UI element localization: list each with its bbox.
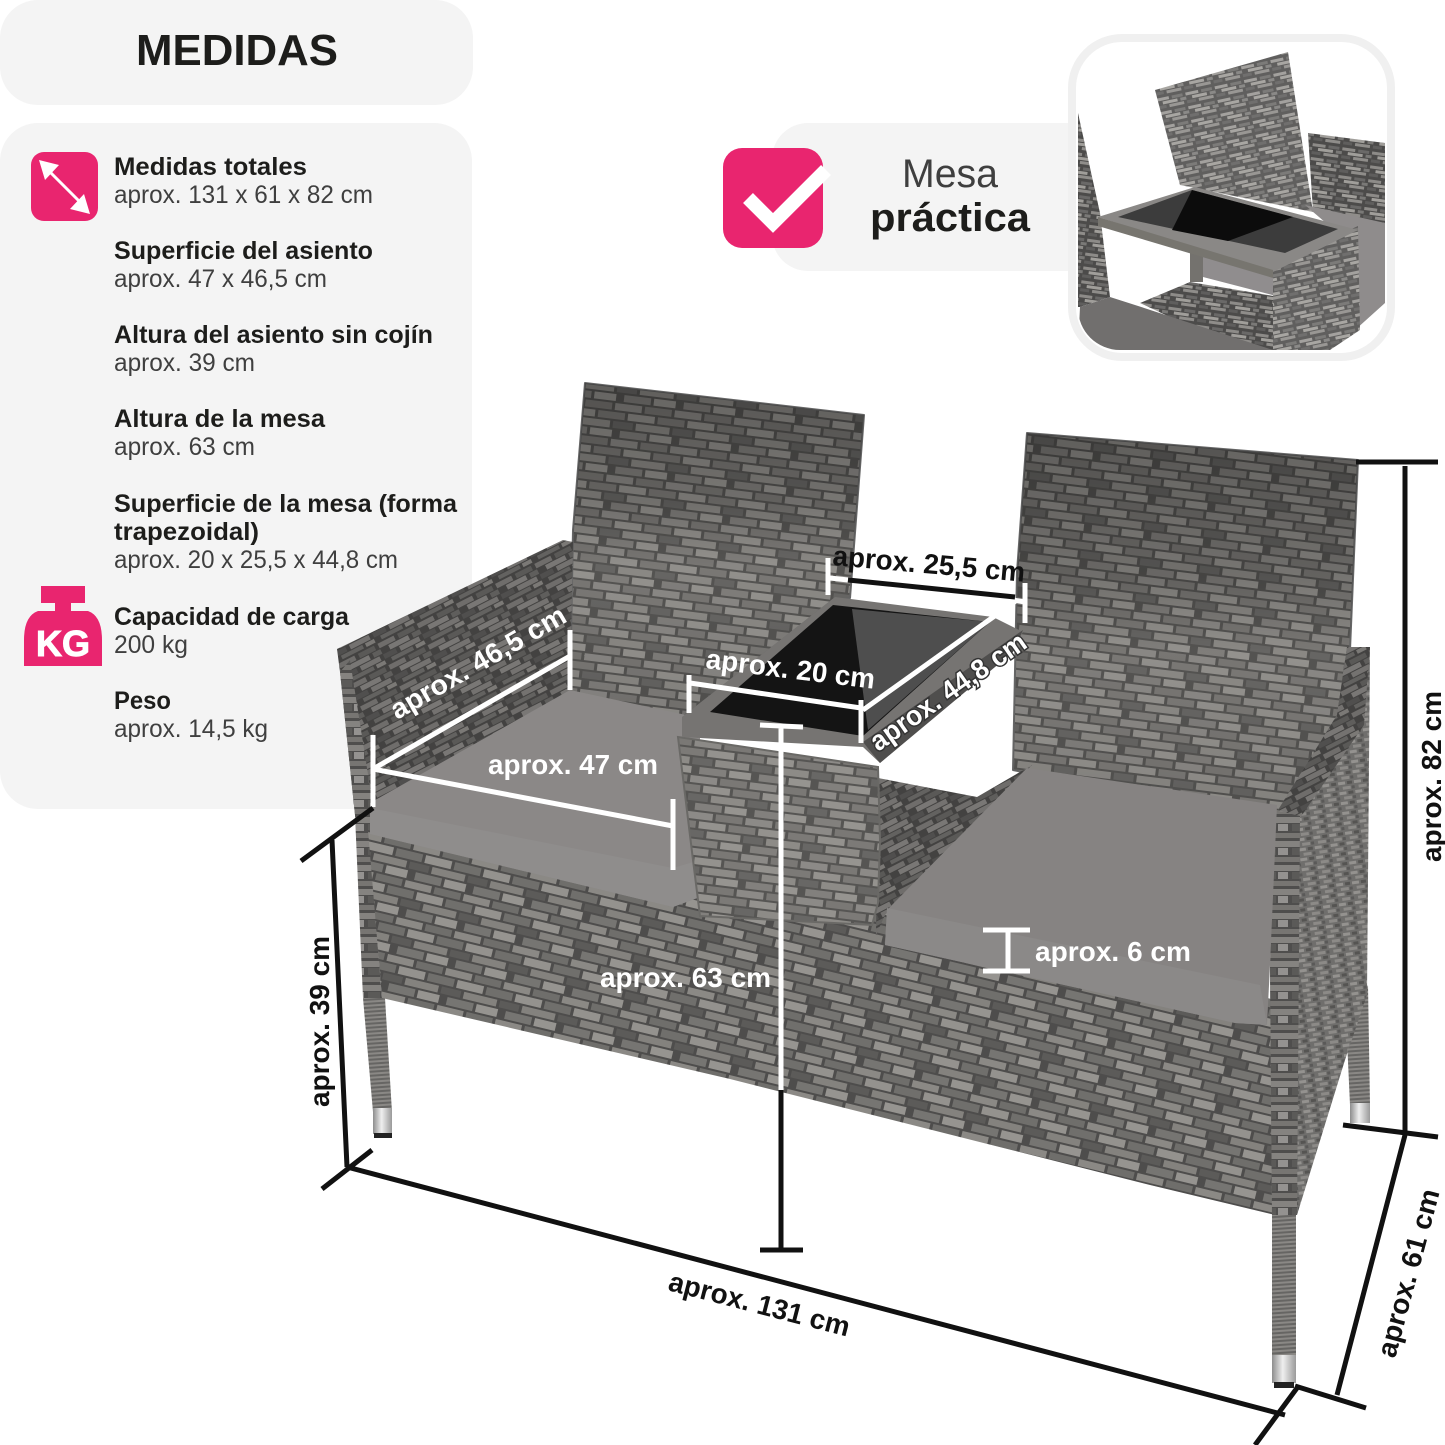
right cushion (885, 768, 1277, 1025)
dimension labels: aprox. 46,5 cm (384, 599, 571, 725)
text block: altura del asiento (114, 321, 433, 377)
right backrest (1013, 433, 1358, 830)
dimension labels: aprox. 20 cm (704, 643, 877, 695)
icon: diagonal arrows (31, 152, 98, 221)
text block: altura de la mesa: aprox. 63 cm (114, 433, 255, 461)
callout: mesa práctica (723, 123, 1102, 271)
table column (678, 737, 880, 925)
text block: superficie del asiento (114, 237, 373, 293)
text block: altura del asiento: Altura del asiento sin cojín (114, 321, 433, 349)
back right leg (1347, 985, 1370, 1123)
dimension labels: aprox. 63 cm (600, 962, 771, 993)
right armrest (1270, 647, 1370, 1215)
left armrest (337, 540, 573, 998)
dimension lines: black (301, 462, 1438, 1445)
front left leg (363, 998, 392, 1138)
text block: capacidad de carga: Capacidad de carga (114, 603, 350, 631)
icon: kg weight: KG (36, 623, 90, 664)
shelf under table (876, 765, 1032, 935)
title panel: Medidas: MEDIDAS (136, 26, 338, 75)
text block: superficie de la mesa: aprox. 20 x 25,5 x 44,8 cm (114, 546, 398, 574)
text block: peso: aprox. 14,5 kg (114, 715, 268, 743)
dimension labels: aprox. 39 cm (304, 936, 335, 1107)
text block: peso: Peso (114, 687, 171, 715)
text block: capacidad de carga (114, 603, 350, 659)
text block: medidas totales: Medidas totales (114, 153, 307, 181)
dimension labels (304, 540, 1445, 1361)
text block: superficie del asiento: aprox. 47 x 46,5 cm (114, 265, 327, 293)
text block: capacidad de carga: 200 kg (114, 631, 188, 659)
icon: kg weight (24, 586, 102, 666)
text block: altura del asiento: aprox. 39 cm (114, 349, 255, 377)
dimension labels: aprox. 44,8 cm (864, 626, 1032, 757)
table dark side band (863, 630, 1023, 763)
text block: altura de la mesa: Altura de la mesa (114, 405, 326, 433)
left cushion (370, 690, 700, 907)
glass top (710, 605, 990, 736)
text block: superficie del asiento: Superficie del asiento (114, 237, 373, 265)
dimension labels: aprox. 131 cm (665, 1266, 853, 1342)
bench base front (368, 830, 1275, 1215)
callout: mesa práctica: Mesa (902, 152, 999, 196)
text block: medidas totales: aprox. 131 x 61 x 82 cm (114, 181, 373, 209)
table frame (682, 597, 1023, 763)
inset photo: mesa detail (1072, 38, 1391, 357)
dimension lines: white (373, 558, 1030, 1090)
panel: lista de medidas (0, 123, 472, 809)
text block: medidas totales (114, 153, 373, 209)
callout: mesa práctica: práctica (870, 196, 1031, 240)
title panel: Medidas (0, 0, 473, 105)
dimension labels: aprox. 6 cm (1035, 936, 1191, 967)
text block: superficie de la mesa: trapezoidal) (114, 518, 259, 546)
text block: superficie de la mesa (114, 490, 458, 574)
icon: check mark (723, 148, 826, 248)
dimension labels: aprox. 47 cm (488, 749, 658, 780)
text block: superficie de la mesa: Superficie de la mesa (forma (114, 490, 458, 518)
text block: peso (114, 687, 268, 743)
dimension labels: aprox. 61 cm (1371, 1185, 1445, 1361)
illustration: wicker bench (337, 383, 1370, 1388)
text block: altura de la mesa (114, 405, 326, 461)
left backrest (570, 383, 864, 716)
dimension labels: aprox. 25,5 cm (831, 540, 1026, 588)
front right leg (1272, 1205, 1296, 1388)
